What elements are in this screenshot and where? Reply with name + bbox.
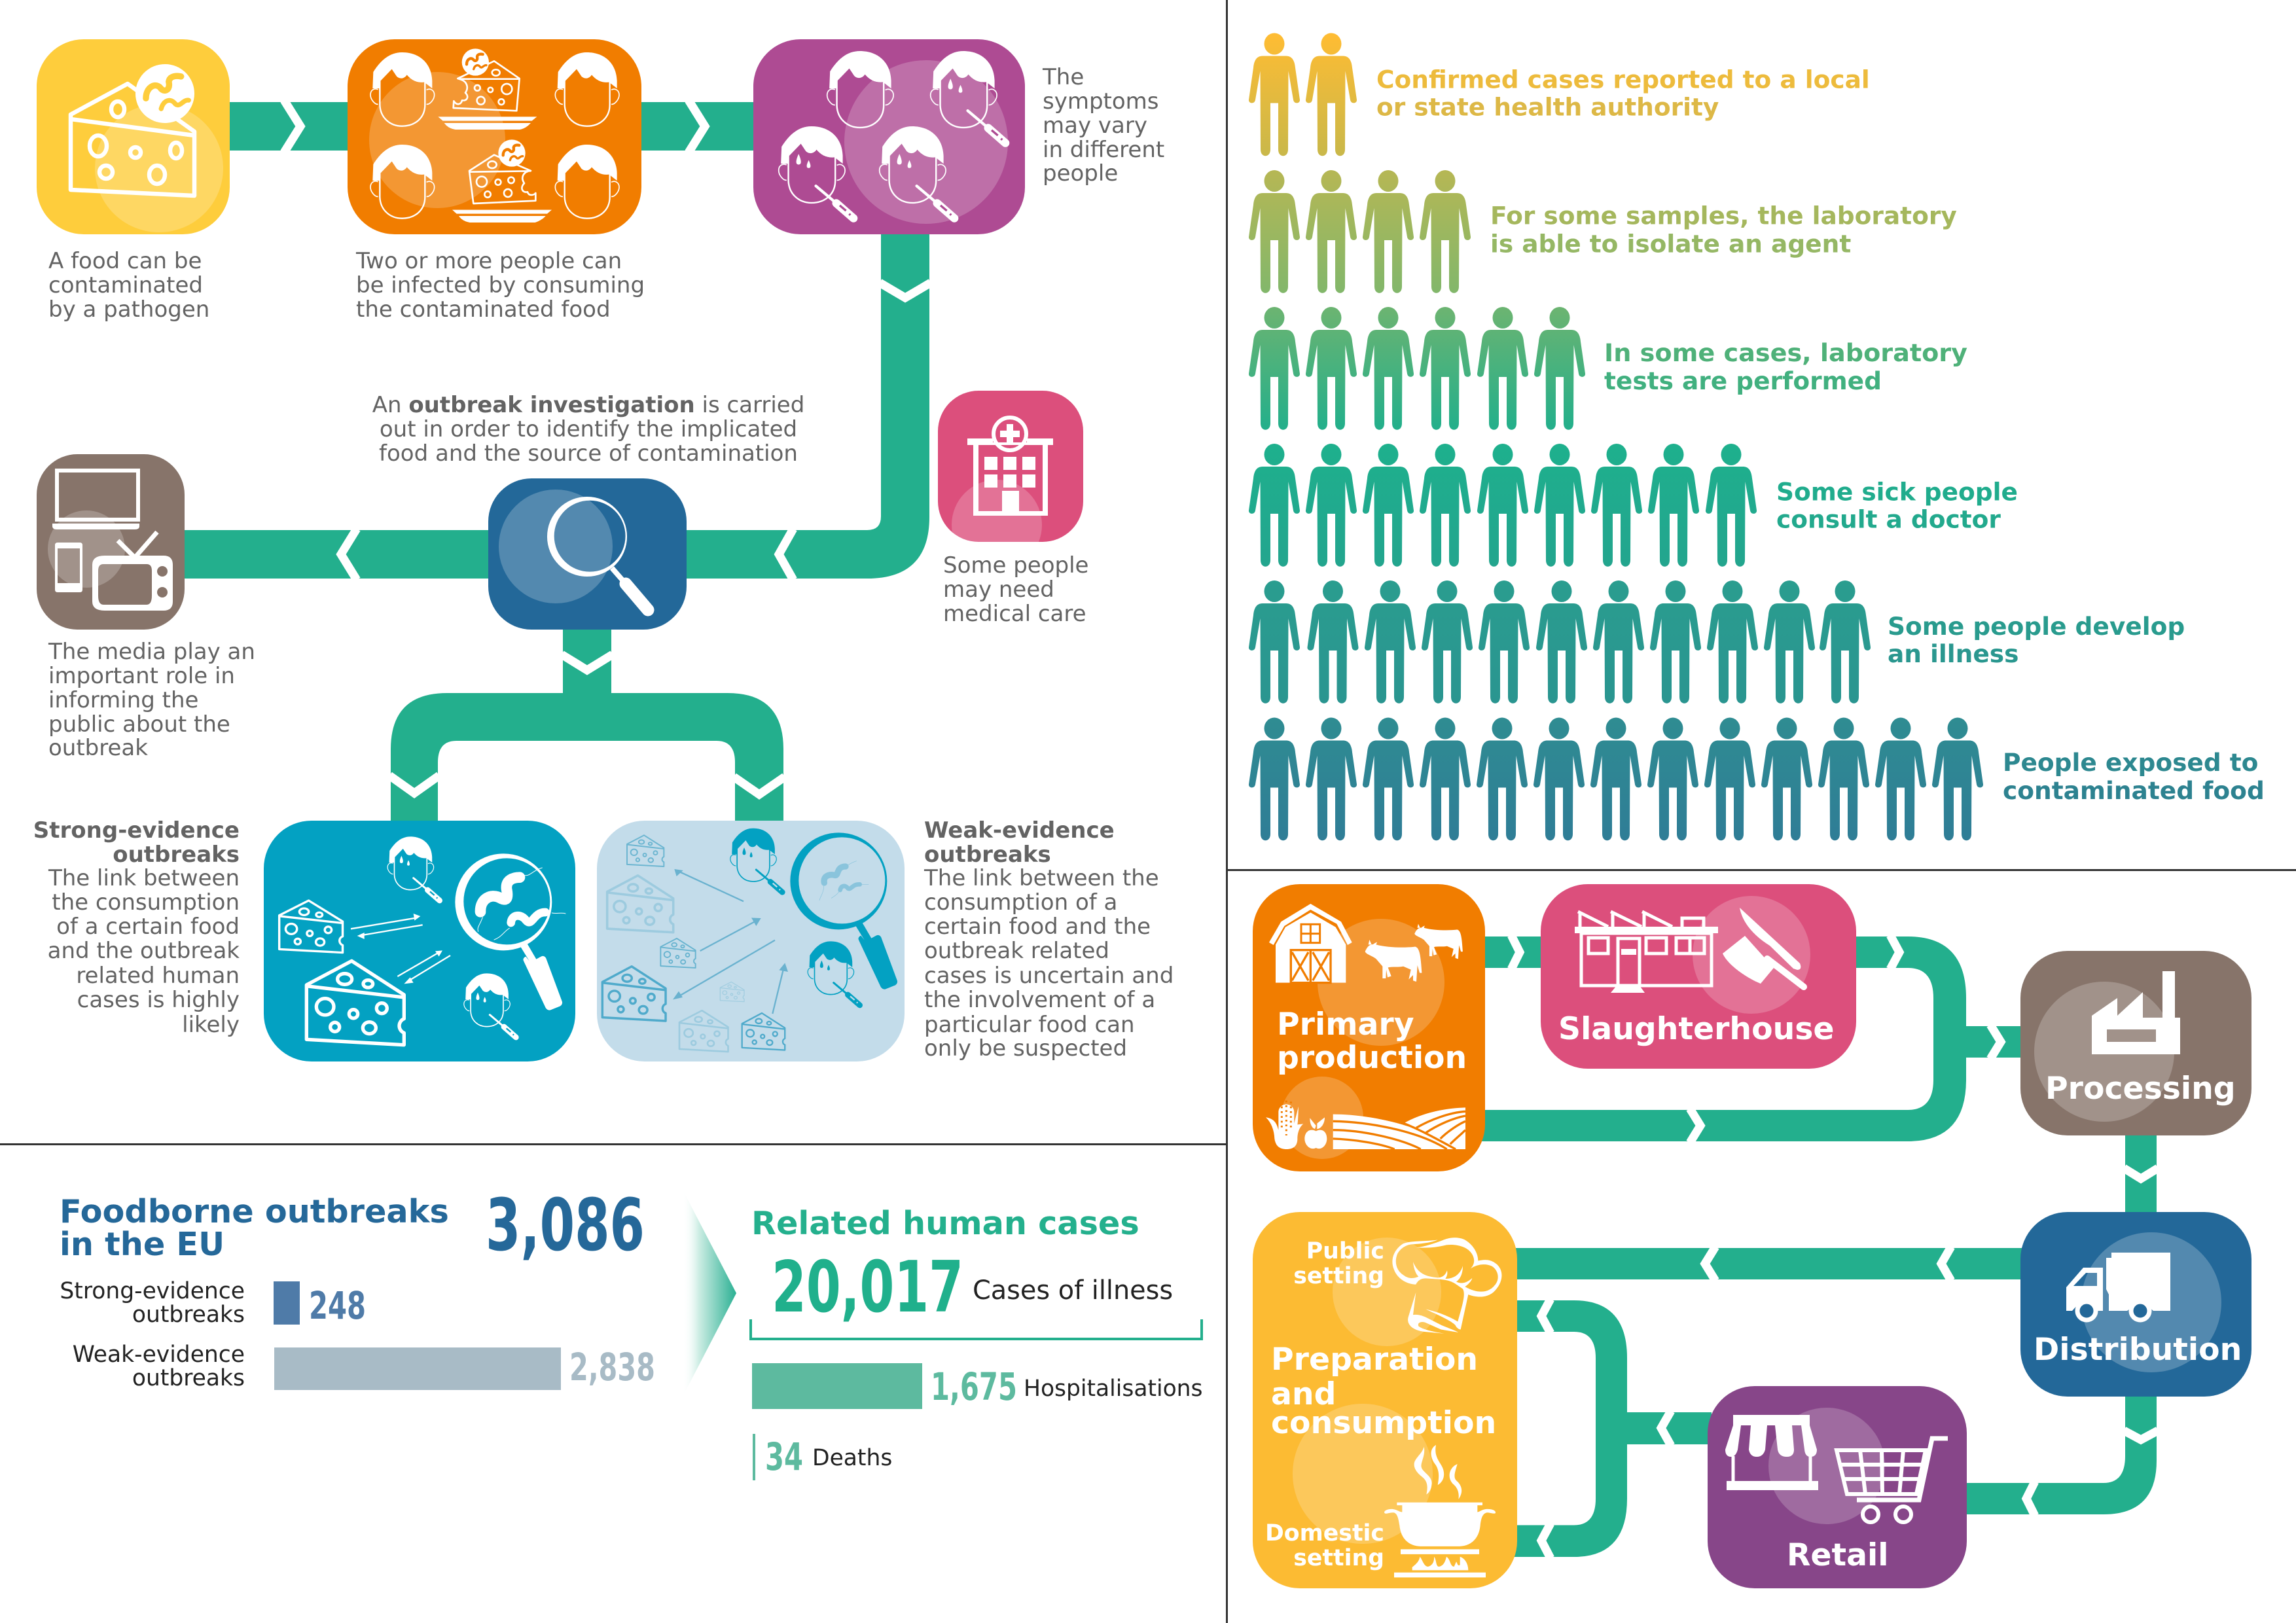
- label: processing: Processing: [2045, 1071, 2236, 1107]
- text: food contaminated: A food can be: [48, 248, 202, 274]
- icon: knife and cleaver: [1723, 908, 1804, 987]
- text: food contaminated: contaminated: [48, 272, 203, 298]
- label: consult a doctor: consult a doctor: [1776, 505, 2001, 534]
- arrow: symptoms to investigation: [681, 229, 931, 580]
- bar: strong-evidence: [274, 1281, 300, 1325]
- card: retail: [1708, 1386, 1967, 1588]
- arrow: primary production to slaughterhouse: [1479, 935, 1545, 969]
- icon: cows: [1365, 924, 1463, 982]
- row: confirmed cases people: [1249, 33, 1357, 156]
- text: symptoms vary: people: [1043, 160, 1118, 187]
- number: total outbreaks: 3,086: [486, 1183, 645, 1267]
- arrow: retail to preparation: [1512, 1299, 1712, 1558]
- card: medical care: [938, 391, 1083, 542]
- arrow: distribution to retail: [1964, 1391, 2158, 1516]
- icon: factory: [2092, 971, 2180, 1054]
- text: strong-evidence outbreaks: the consumption: [52, 889, 240, 916]
- text: media role: public about the: [48, 711, 230, 738]
- label: people exposed: contaminated food: [2003, 776, 2265, 805]
- text: weak-evidence outbreaks: outbreak related: [924, 938, 1109, 964]
- text: medical care: may need: [943, 577, 1054, 603]
- text: weak-evidence outbreaks: cases is uncertain and: [924, 963, 1174, 989]
- text: strong-evidence outbreaks: of a certain food: [56, 914, 240, 940]
- text: symptoms vary: symptoms: [1043, 88, 1159, 115]
- label: people exposed: People exposed to: [2003, 748, 2258, 777]
- text: food contaminated: by a pathogen: [48, 296, 209, 323]
- card: distribution: [2020, 1212, 2251, 1397]
- label: retail: Retail: [1787, 1537, 1888, 1573]
- card: primary production: [1253, 884, 1485, 1171]
- card: symptoms: [753, 39, 1025, 234]
- bar: deaths: [753, 1434, 755, 1480]
- text: outbreak investigation: An outbreak investigation is carried: [372, 392, 804, 418]
- text: outbreak investigation: food and the source of contamination: [379, 440, 798, 467]
- row: laboratory isolates people: [1249, 170, 1471, 293]
- text: people infected: the contaminated food: [356, 296, 611, 323]
- card: contaminated food: [37, 39, 230, 234]
- label: preparation and consumption: Preparation: [1271, 1342, 1478, 1378]
- label: domestic setting: Domestic: [1265, 1520, 1384, 1546]
- text: people infected: be infected by consuming: [356, 272, 645, 298]
- label: weak-evidence outbreaks: Weak-evidence: [73, 1342, 245, 1368]
- arrow: investigation to evidence branches: [389, 622, 785, 825]
- label: develop an illness: an illness: [1888, 639, 2018, 668]
- text: media role: important role in: [48, 663, 235, 689]
- label: slaughterhouse: Slaughterhouse: [1558, 1011, 1834, 1047]
- text: media role: The media play an: [48, 639, 255, 665]
- label: hospitalisations: Hospitalisations: [1024, 1376, 1203, 1402]
- label: primary production: Primary: [1277, 1007, 1414, 1043]
- text: strong-evidence outbreaks: related human: [76, 963, 240, 989]
- text: media role: outbreak: [48, 735, 148, 761]
- arrow: processing to distribution: [2124, 1132, 2158, 1217]
- text: strong-evidence outbreaks: Strong-evidence: [33, 817, 240, 844]
- label: develop an illness: Some people develop: [1888, 612, 2185, 641]
- text: strong-evidence outbreaks: likely: [182, 1012, 240, 1038]
- text: outbreak investigation: out in order to identify the implicated: [380, 416, 797, 442]
- label: laboratory tests: In some cases, laboratory: [1604, 338, 1967, 367]
- card: outbreak investigation: [488, 478, 687, 630]
- label: strong-evidence outbreaks: outbreaks: [132, 1302, 245, 1328]
- text: people infected: Two or more people can: [355, 248, 622, 274]
- heading: related human cases: Related human cases: [751, 1204, 1139, 1242]
- text: weak-evidence outbreaks: certain food and the: [924, 914, 1151, 940]
- card: weak-evidence outbreaks: [597, 821, 905, 1061]
- icon: truck: [2066, 1253, 2170, 1320]
- text: strong-evidence outbreaks: The link between: [48, 865, 240, 891]
- text: medical care: medical care: [943, 601, 1086, 627]
- label: confirmed cases: Confirmed cases reported to a local: [1376, 65, 1870, 94]
- label: public setting: Public: [1306, 1238, 1384, 1264]
- label: laboratory isolates: is able to isolate an agent: [1490, 229, 1851, 258]
- text: weak-evidence outbreaks: Weak-evidence: [924, 817, 1115, 844]
- arrow: distribution to public setting: [1512, 1247, 2026, 1281]
- card: preparation and consumption: [1253, 1212, 1517, 1588]
- icon: steaming pot on burner: [1384, 1445, 1496, 1577]
- text: weak-evidence outbreaks: The link between the: [924, 865, 1159, 891]
- text: symptoms vary: may vary: [1043, 113, 1147, 139]
- panel: food chain: [1253, 884, 2251, 1588]
- arrow: investigation to media: [177, 529, 497, 580]
- panel: foodborne outbreaks statistics: [60, 1183, 1203, 1480]
- label: laboratory isolates: For some samples, the laboratory: [1490, 202, 1957, 230]
- label: preparation and consumption: consumption: [1271, 1405, 1496, 1441]
- card: people infected: [348, 39, 641, 234]
- card: processing: [2020, 951, 2251, 1135]
- arrow: loop to processing: [1479, 935, 2026, 1143]
- icon: fields: [1333, 1107, 1465, 1149]
- text: strong-evidence outbreaks: outbreaks: [113, 842, 240, 868]
- label: strong-evidence outbreaks: Strong-evidence: [60, 1278, 245, 1304]
- label: cases of illness: Cases of illness: [973, 1275, 1173, 1306]
- label: confirmed cases: or state health authority: [1376, 93, 1719, 122]
- bar: hospitalisations: [752, 1363, 922, 1409]
- heading: foodborne outbreaks: in the EU: [60, 1225, 224, 1263]
- text: medical care: Some people: [943, 552, 1088, 579]
- arrow: food to people: [223, 100, 353, 152]
- label: preparation and consumption: and: [1271, 1376, 1336, 1412]
- bracket: [751, 1319, 1202, 1339]
- text: weak-evidence outbreaks: outbreaks: [924, 842, 1051, 868]
- text: weak-evidence outbreaks: particular food can: [924, 1012, 1135, 1038]
- number: weak-evidence: 2,838: [569, 1345, 655, 1389]
- heading: foodborne outbreaks: Foodborne outbreaks: [60, 1192, 449, 1230]
- label: consult a doctor: Some sick people: [1776, 478, 2018, 507]
- card: media: [37, 454, 185, 630]
- arrow: outbreaks to cases: [683, 1190, 736, 1397]
- card: slaughterhouse: [1541, 884, 1856, 1069]
- number: hospitalisations: 1,675: [931, 1364, 1017, 1409]
- text: strong-evidence outbreaks: cases is highly: [77, 987, 240, 1013]
- arrow: people to symptoms: [635, 100, 759, 152]
- row: laboratory tests people: [1249, 307, 1585, 430]
- label: deaths: Deaths: [812, 1445, 892, 1471]
- row: illness people: [1249, 580, 1871, 704]
- row: exposed people: [1249, 717, 1983, 840]
- number: deaths: 34: [765, 1435, 803, 1479]
- number: cases of illness: 20,017: [772, 1247, 963, 1329]
- panel: how an outbreak unfolds: [33, 39, 1174, 1061]
- text: strong-evidence outbreaks: and the outbreak: [48, 938, 240, 964]
- label: primary production: production: [1277, 1040, 1467, 1076]
- number: strong-evidence: 248: [309, 1283, 366, 1328]
- label: laboratory tests: tests are performed: [1604, 366, 1882, 395]
- text: symptoms vary: The: [1042, 64, 1084, 90]
- text: weak-evidence outbreaks: only be suspected: [924, 1035, 1127, 1061]
- text: symptoms vary: in different: [1043, 137, 1164, 163]
- text: weak-evidence outbreaks: the involvement of a: [924, 987, 1155, 1013]
- icon: shopping cart: [1837, 1438, 1948, 1522]
- card: strong-evidence outbreaks: [264, 821, 575, 1061]
- text: weak-evidence outbreaks: consumption of a: [924, 889, 1117, 916]
- icon: barn: [1269, 904, 1352, 983]
- label: public setting: setting: [1293, 1263, 1384, 1289]
- icon: corn and apple: [1266, 1101, 1327, 1149]
- label: distribution: Distribution: [2034, 1332, 2242, 1368]
- panel: reporting pyramid: [1249, 33, 2265, 840]
- row: consult doctor people: [1249, 444, 1757, 567]
- icon: shop: [1725, 1415, 1818, 1490]
- bar: weak-evidence: [274, 1347, 561, 1390]
- label: weak-evidence outbreaks: outbreaks: [132, 1365, 245, 1391]
- icon: slaughterhouse building: [1575, 912, 1718, 993]
- text: media role: informing the: [48, 687, 198, 713]
- icon: chef hat: [1392, 1238, 1501, 1334]
- label: domestic setting: setting: [1293, 1545, 1384, 1571]
